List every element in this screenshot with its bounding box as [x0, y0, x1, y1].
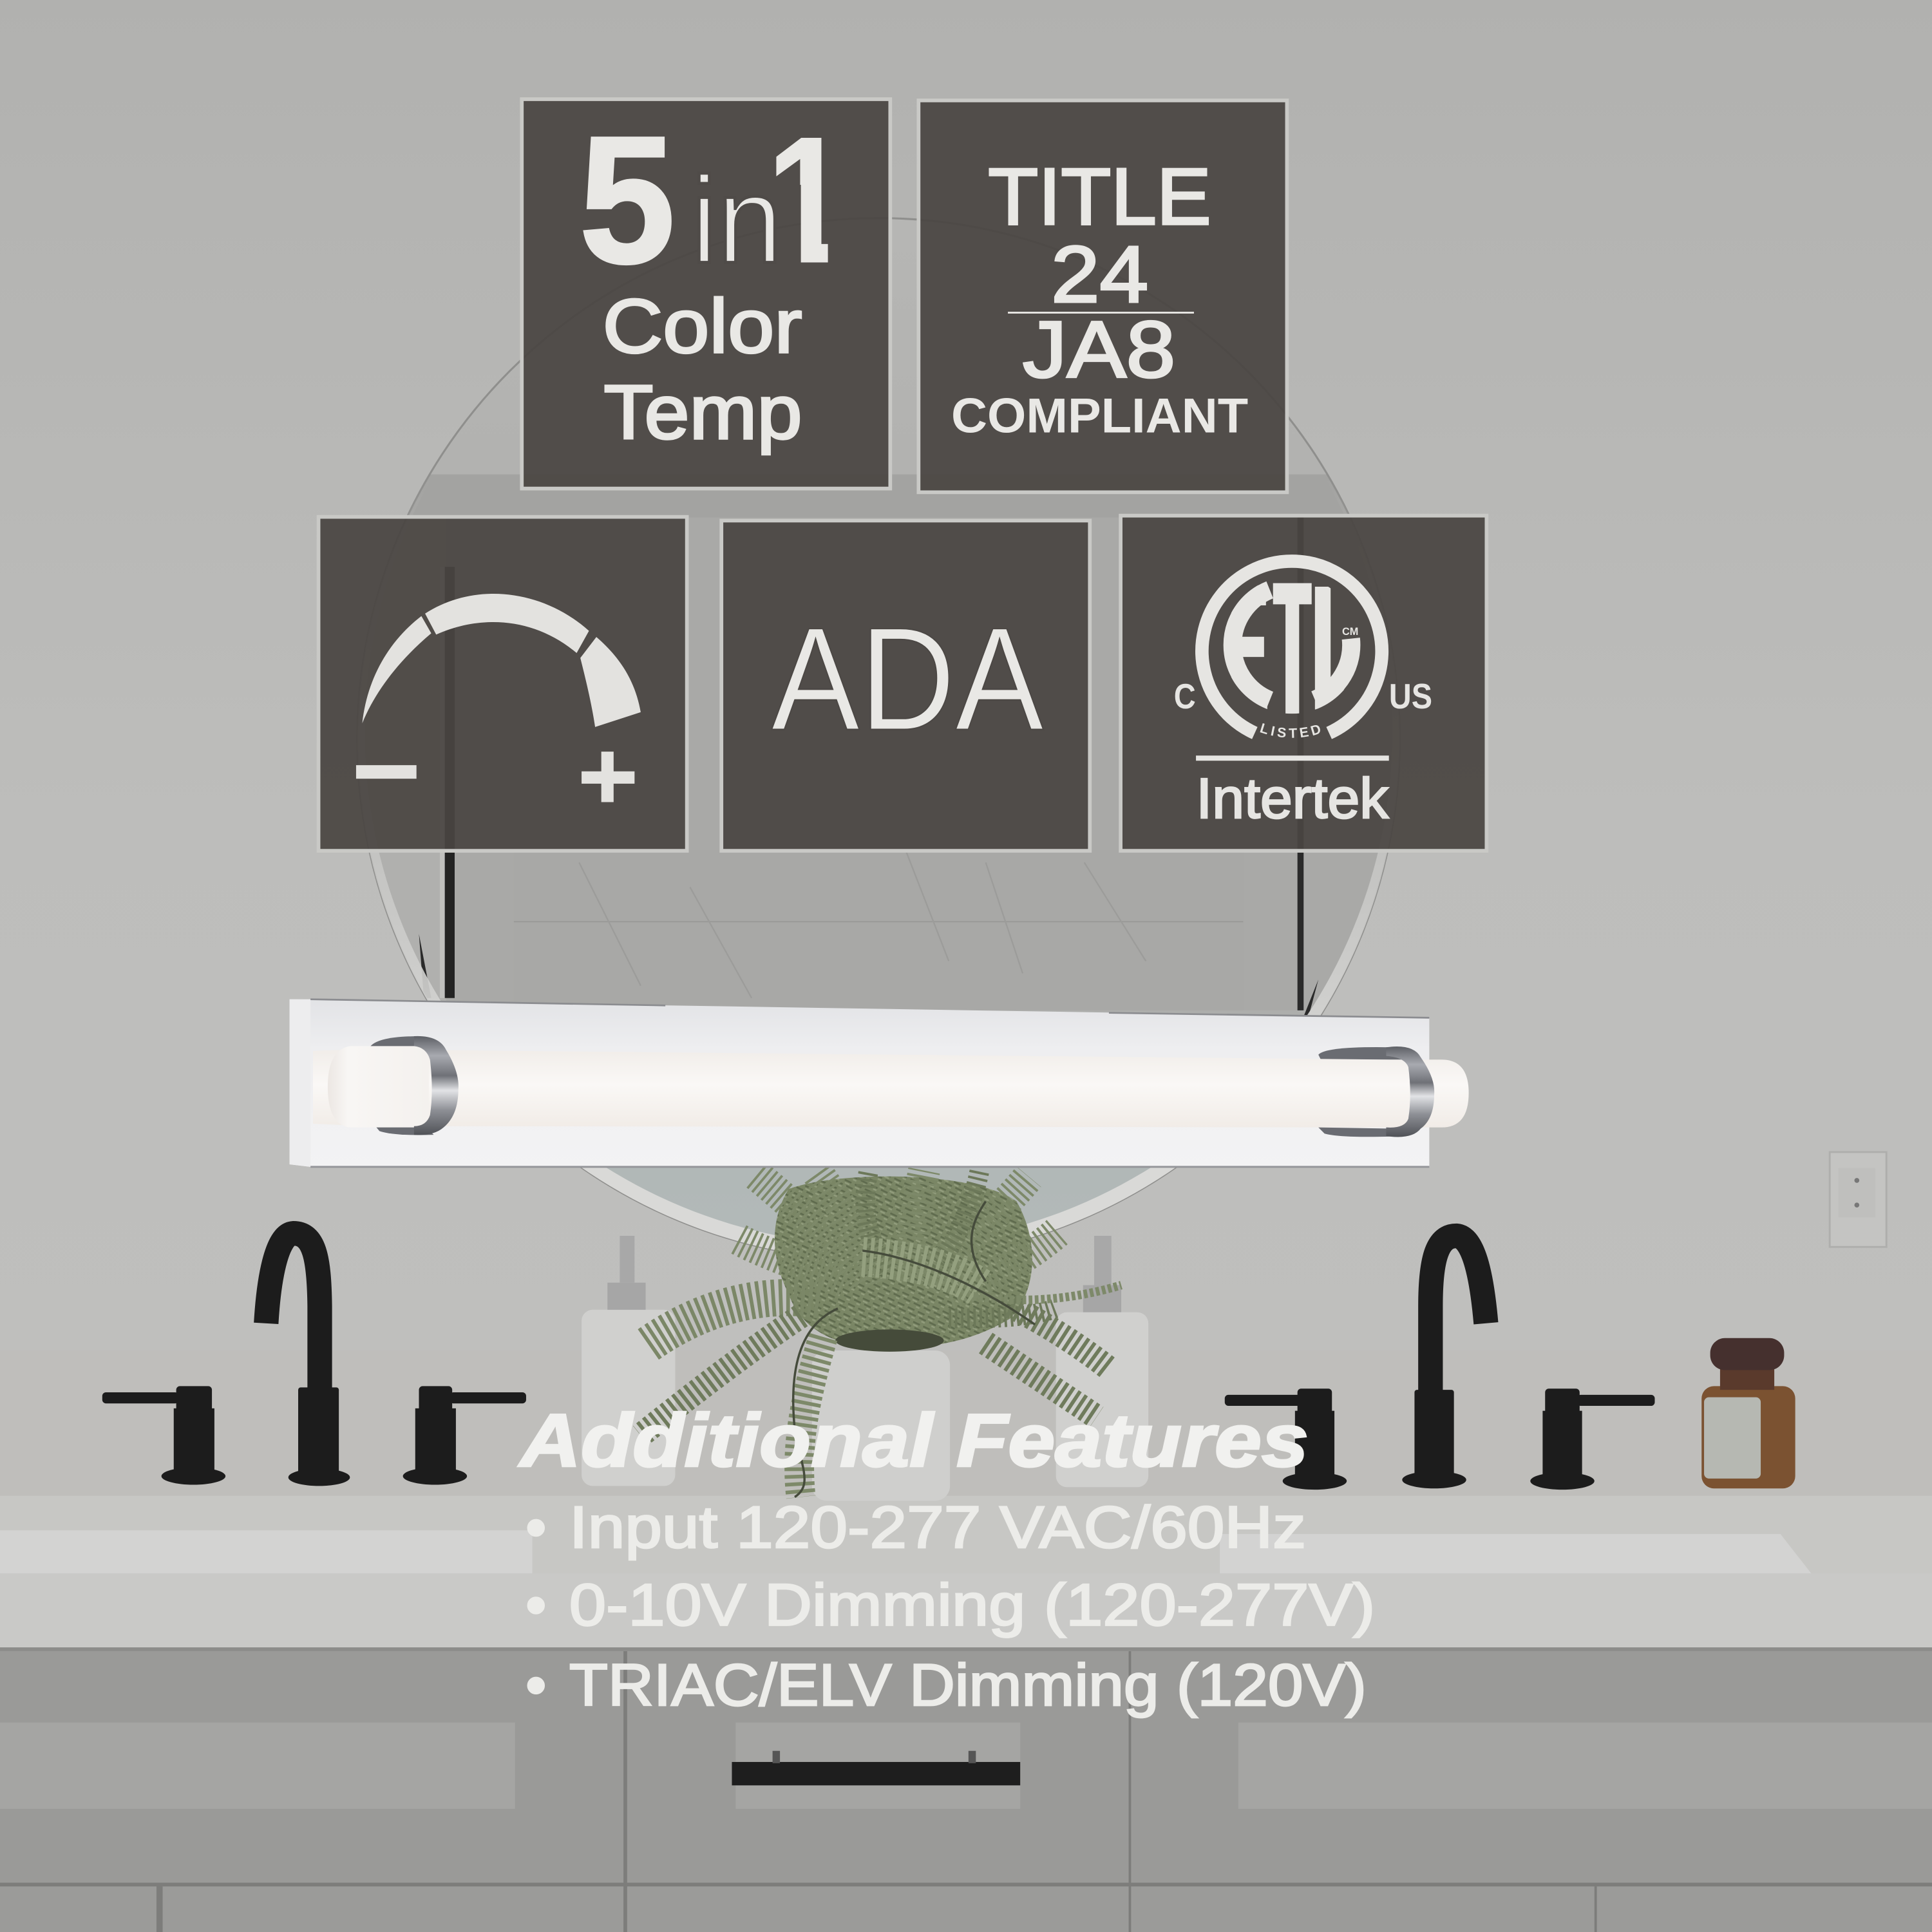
icon: ETL mark: LISTED [1260, 723, 1320, 738]
panel: dimming [319, 517, 687, 851]
left end cap [328, 1046, 429, 1128]
bullet: input voltage: Input 120-277 VAC/60Hz [569, 1495, 1306, 1560]
heading: 5 in 1: 5 [579, 99, 675, 301]
right chrome band [1386, 1046, 1434, 1137]
label: TITLE: TITLE [988, 152, 1211, 242]
label: JA8: JA8 [1023, 305, 1175, 394]
icon: ETL mark: L [1307, 548, 1375, 748]
soap dispensers [582, 1236, 1148, 1487]
panel: ADA [721, 520, 1090, 851]
vanity cabinets [0, 1651, 1932, 1932]
white vase [812, 1350, 950, 1501]
label: Color: Color [603, 284, 802, 369]
label: ADA: ADA [772, 598, 1044, 761]
icon: dimmer gauge [356, 594, 641, 802]
icon: ETL mark: T [1264, 542, 1321, 754]
amber jar [1701, 1338, 1795, 1488]
heading: Additional Features [518, 1398, 1309, 1482]
label: COMPLIANT: COMPLIANT [951, 389, 1248, 444]
label: Temp: Temp [603, 370, 802, 455]
icon: ETL mark: CM [1342, 625, 1358, 638]
fern plant [641, 1171, 1121, 1497]
heading: 5 in 1: in [691, 151, 782, 289]
icon: plus [582, 752, 634, 802]
wall outlet [1830, 1152, 1886, 1247]
label: Intertek: Intertek [1196, 766, 1389, 830]
backsplash [0, 1350, 1932, 1501]
left chrome band [414, 1036, 459, 1135]
opal tube [313, 1049, 1469, 1128]
bullet: 0-10V dimming: 0-10V Dimming (120-277V) [569, 1573, 1375, 1638]
round mirror [357, 218, 1405, 1260]
vanity light fixture [290, 999, 1469, 1167]
icon: ETL mark [1174, 554, 1432, 830]
countertop [0, 1496, 1932, 1651]
wall [0, 0, 1932, 1356]
heading: 5 in 1: 1 [764, 99, 850, 301]
right faucet [1225, 1236, 1655, 1490]
icon: ETL mark: E [1227, 546, 1270, 749]
text block: additional features [518, 1398, 1375, 1718]
icon: ETL mark: C [1174, 676, 1196, 716]
bullet: TRIAC dimming: TRIAC/ELV Dimming (120V) [569, 1653, 1367, 1718]
chrome backplate [290, 999, 1429, 1167]
label: 24: 24 [1051, 230, 1148, 319]
panel: 5 in 1 color temp [522, 99, 890, 489]
left faucet [102, 1233, 526, 1486]
panel: ETL listed [1119, 514, 1488, 853]
drawer pull [732, 1751, 1020, 1785]
heading: 5 in 1 [583, 137, 828, 265]
rear clamp shadows [370, 1036, 1405, 1137]
icon: ETL mark: US [1389, 676, 1432, 716]
panel: title 24 JA8 [918, 100, 1287, 492]
icon: minus [356, 765, 417, 779]
